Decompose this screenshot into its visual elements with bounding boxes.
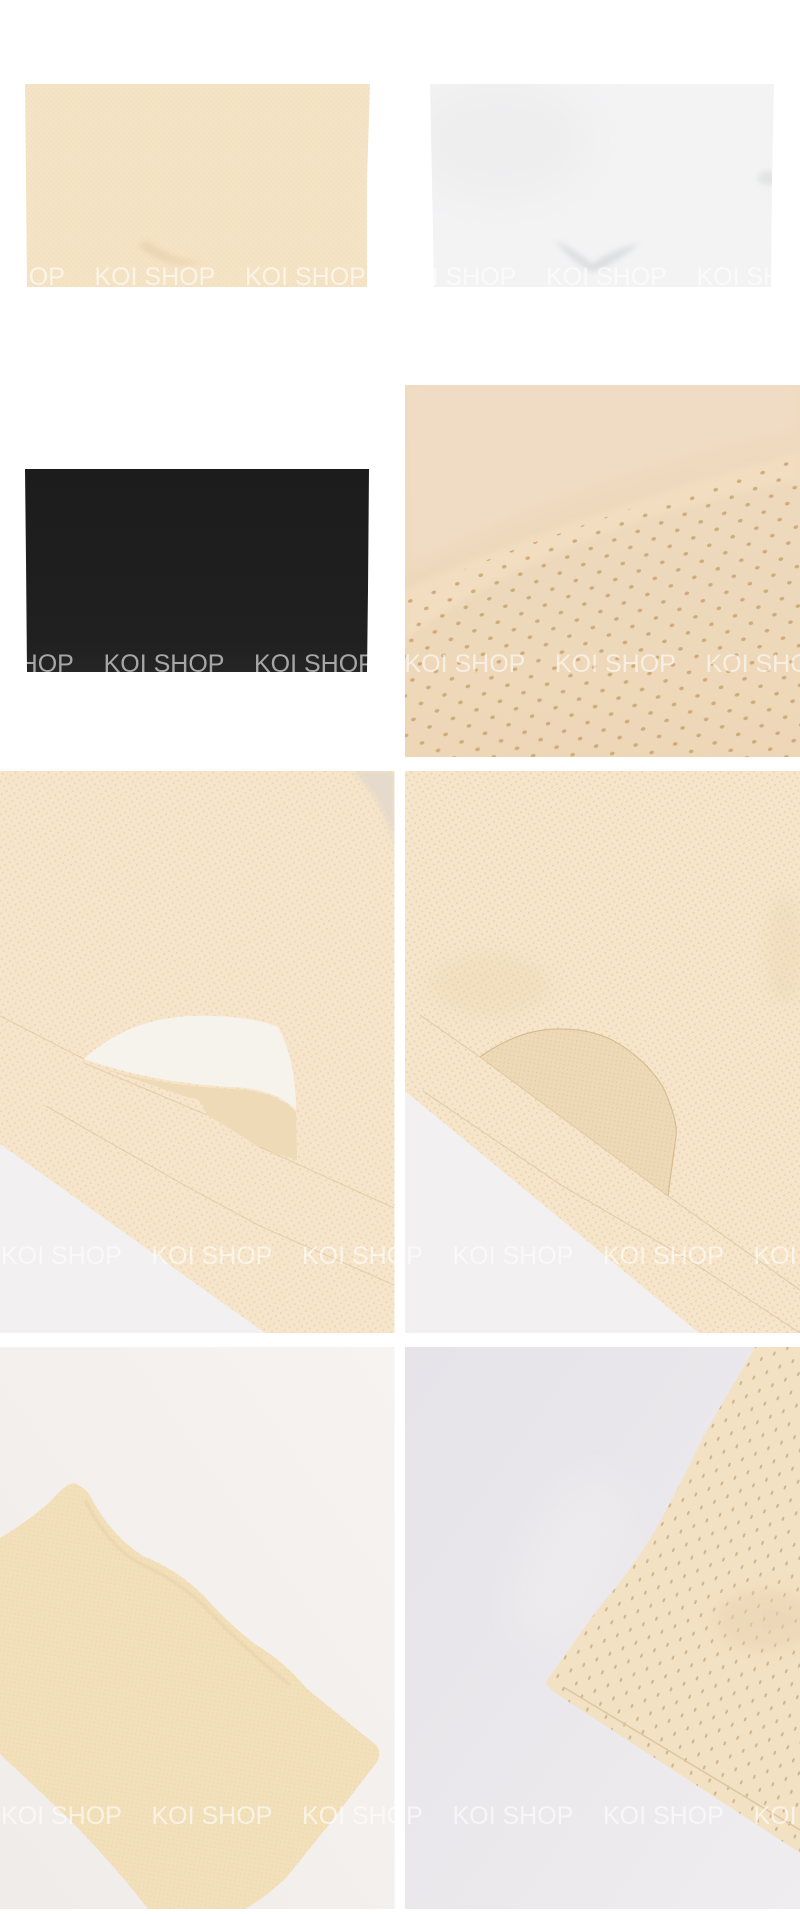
panel: garment corner on grey surface: [405, 1347, 800, 1909]
flap: white lining: [84, 1016, 296, 1110]
watermark row 3: [1, 1242, 800, 1270]
watermark row 3: KOI SHOP: [452, 1242, 573, 1270]
watermark row 2: KOI SHOP: [104, 650, 224, 678]
panel: folded garment flat lay: [0, 1347, 395, 1910]
panel: mesh with scooped opening: [405, 771, 800, 1333]
watermark row 2: KOI SHOP: [555, 650, 676, 678]
panel: black bandeau swatch: [20, 465, 375, 675]
watermark row 1: KOI SHOP: [94, 263, 215, 291]
watermark row 4: [1, 1802, 800, 1830]
watermark row 3: KOI SHOP: [603, 1242, 724, 1270]
watermark row 4: KOI SHOP: [302, 1802, 423, 1830]
white tabletop: [0, 1144, 265, 1333]
panel: white bandeau swatch: [430, 84, 774, 287]
watermark row 1: KOI SHOP: [546, 263, 667, 291]
panel: mesh fabric close-up: [405, 385, 800, 757]
watermark row 4: KOI SHOP: [452, 1802, 573, 1830]
watermark row 2: KOI SHOP: [254, 650, 375, 678]
watermark row 3: KOI SHOP: [152, 1242, 272, 1270]
garment: [0, 1480, 385, 1910]
watermark row 1: [0, 263, 800, 291]
panel: beige bandeau swatch: [20, 80, 375, 290]
watermark row 1: KOI SHOP: [245, 263, 366, 291]
watermark row 4: KOI SHOP: [152, 1802, 272, 1830]
watermark row 4: KOI SHOP: [603, 1802, 724, 1830]
panel: mesh with flap showing white lining: [0, 771, 395, 1333]
watermark row 3: KOI SHOP: [1, 1242, 122, 1270]
watermark row 4: KOI SHOP: [1, 1802, 122, 1830]
watermark row 2: [0, 650, 800, 678]
white tabletop: [405, 1091, 699, 1333]
watermark row 1: KOI SHOP: [396, 263, 516, 291]
watermark row 2: KOI SHOP: [404, 650, 525, 678]
watermark row 3: KOI SHOP: [302, 1242, 423, 1270]
flap: inner fabric under the opening: [100, 1067, 297, 1160]
garment: [540, 1347, 800, 1857]
scooped opening: [480, 1029, 676, 1196]
